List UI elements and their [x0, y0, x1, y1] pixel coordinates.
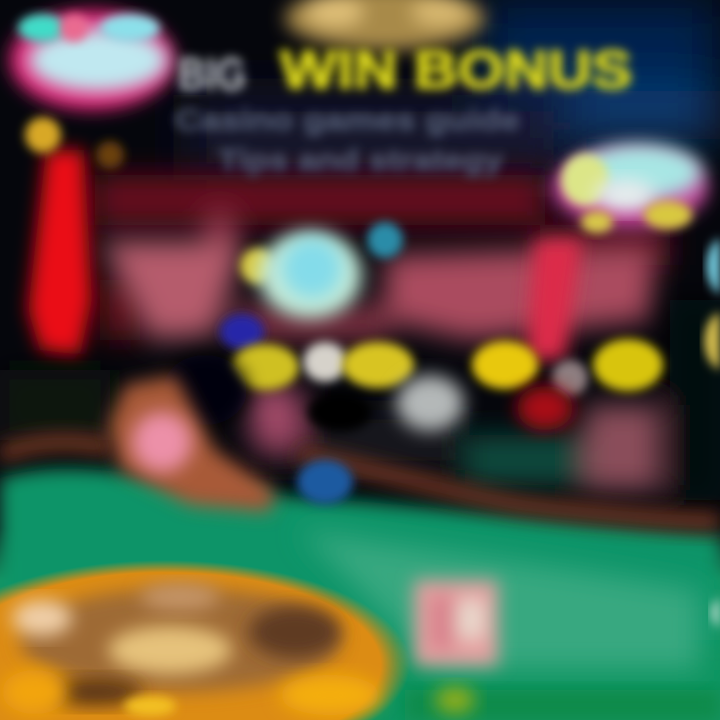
figure: dealer: [108, 355, 275, 512]
red shape: [517, 386, 573, 430]
panel: lower dark room: [0, 300, 720, 500]
subheading copy: Tips and strategy: [218, 144, 503, 177]
panel: pink back wall: [100, 209, 655, 340]
top gold emblem: [285, 0, 485, 50]
heading: WIN BONUS: [280, 40, 632, 100]
table base: [0, 480, 720, 720]
small lamp: [96, 141, 124, 169]
heading: [178, 40, 632, 100]
pink-red column: [526, 240, 582, 360]
heading: BIG: [178, 48, 246, 100]
icon: roulette wheel: [0, 560, 410, 720]
panel: maroon upper wall: [95, 175, 670, 340]
white figure: [396, 375, 464, 431]
logo: top left badge: [10, 10, 174, 110]
gold lamp: [25, 117, 61, 153]
right edge icons: [704, 238, 720, 628]
icon: top right badge: [552, 144, 708, 233]
icon: playing card: [414, 580, 498, 666]
panel: green casino table: [0, 442, 720, 720]
table highlight: [300, 530, 700, 670]
table lower band: [405, 690, 720, 720]
background: night sky and dark hall: [190, 0, 720, 180]
subheading copy: [175, 104, 520, 177]
blue chip stack: [297, 460, 353, 504]
icon: blue marker: [220, 314, 264, 350]
icon: chip on felt: [435, 686, 475, 714]
stat labels row: [231, 339, 663, 396]
table wooden rim: [0, 442, 720, 522]
black shape: [308, 392, 372, 432]
red banner: [28, 150, 92, 355]
icon: center globe: [240, 222, 403, 319]
subheading copy: Casino games guide: [175, 104, 520, 137]
table felt: [0, 469, 720, 640]
